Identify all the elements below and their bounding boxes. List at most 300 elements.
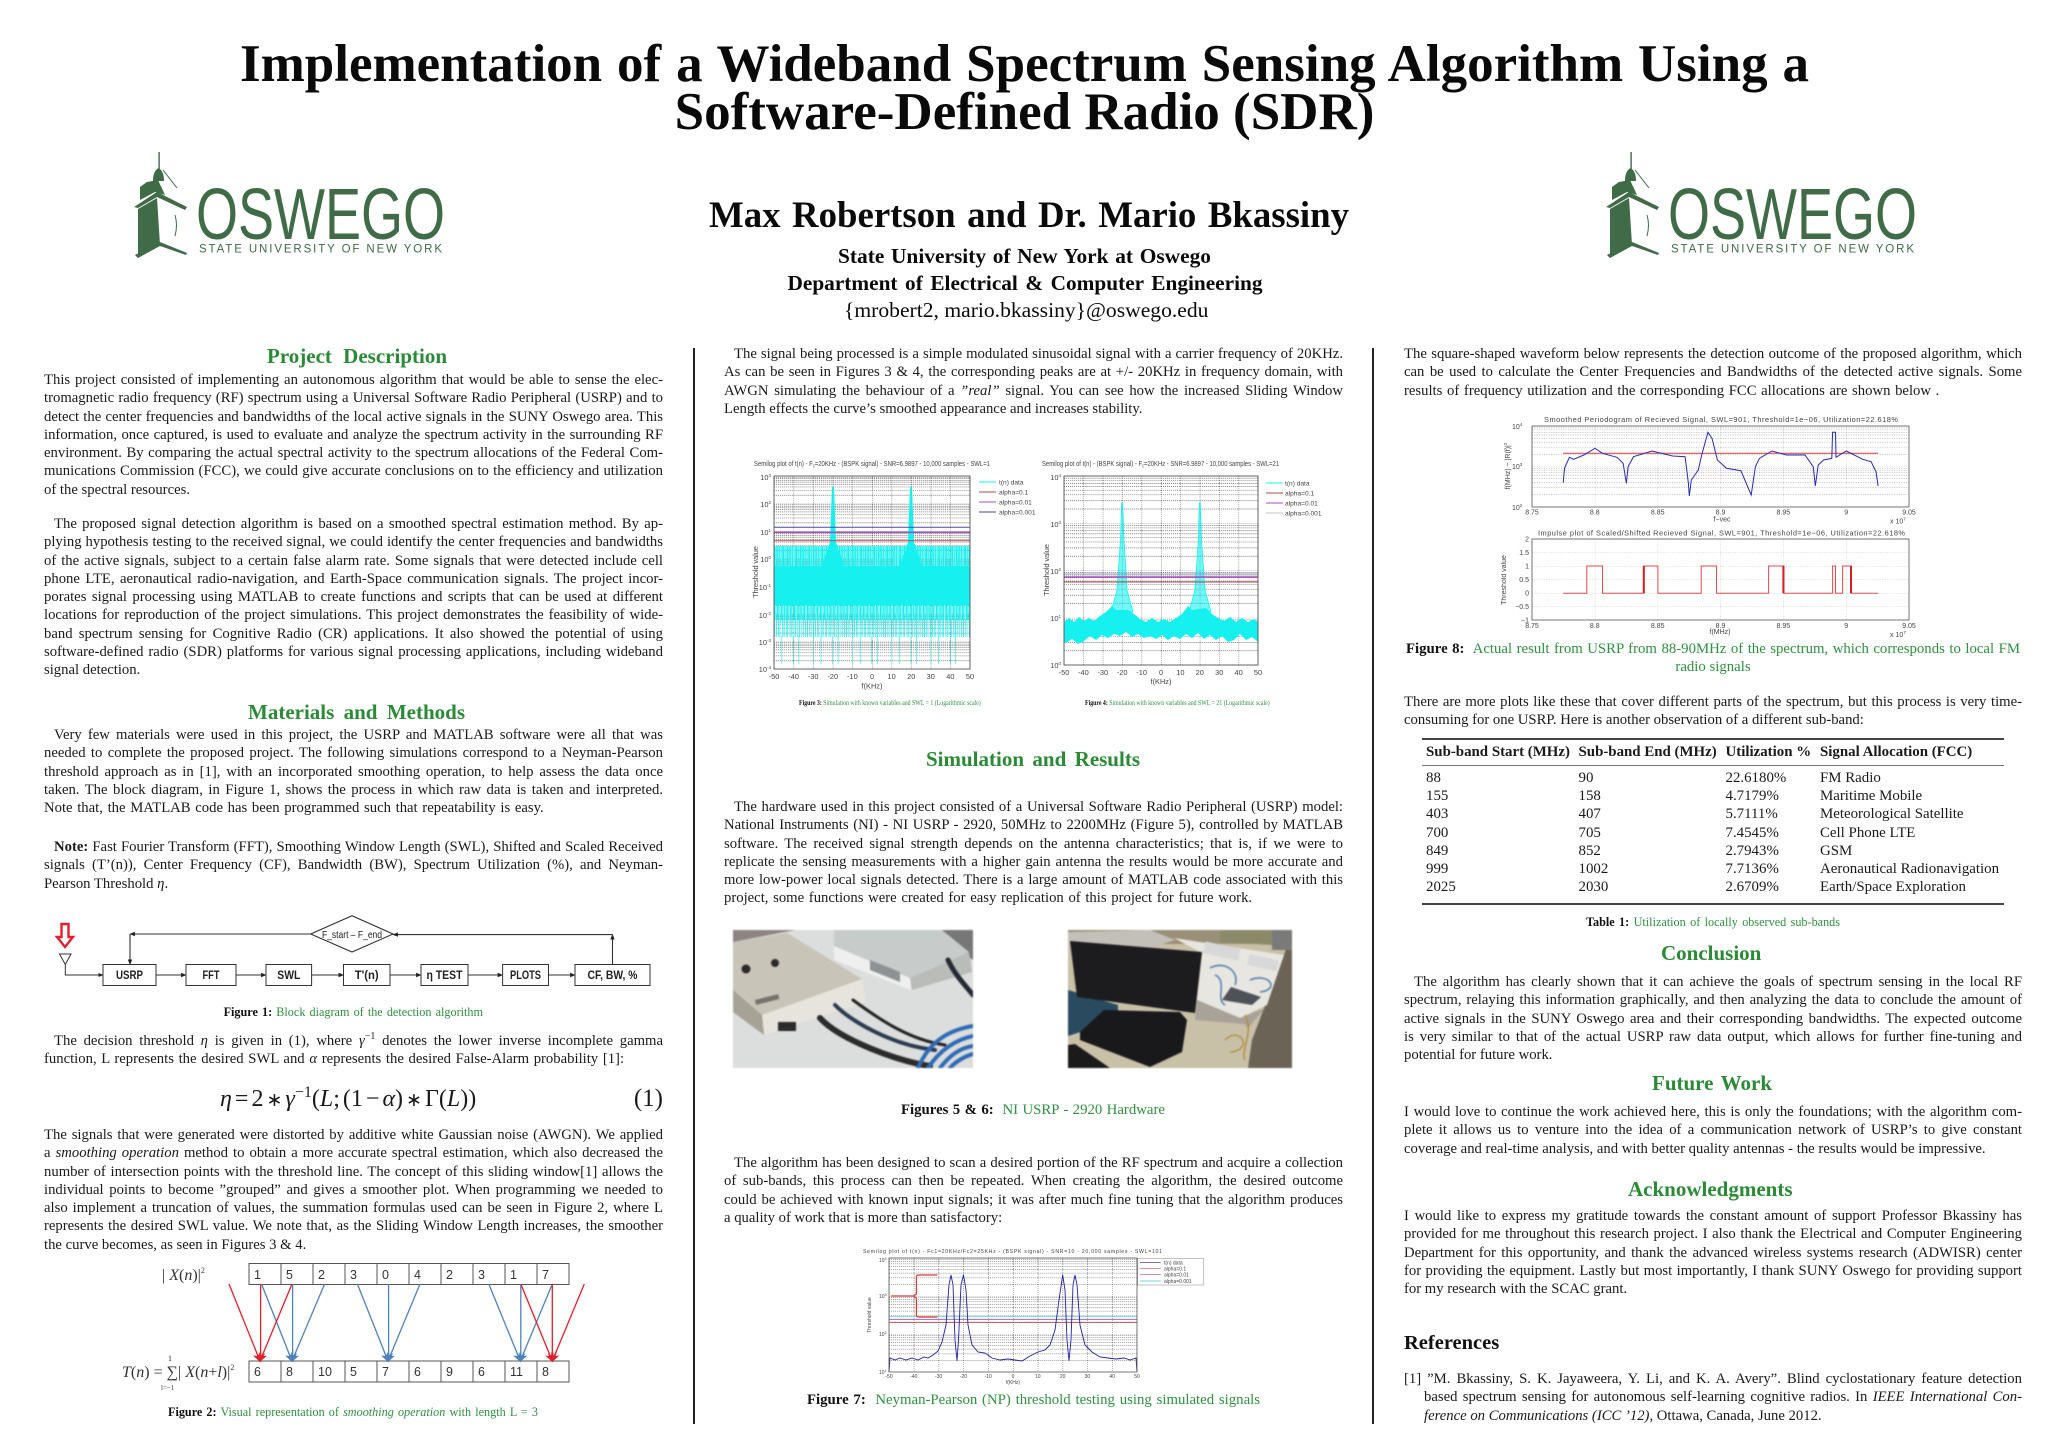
text: more plots: There are more plots like these that cover different parts of the spectrum, but this process is very time-	[1404, 694, 2022, 710]
axis labels: 10	[759, 665, 767, 674]
axis labels: 2	[1058, 567, 1061, 572]
legend: t(n) data	[1285, 480, 1310, 488]
text: materials and methods: Note that, the MATLAB code has been programmed such that repeatability is easy.	[44, 800, 544, 816]
text: signals and smoothing	[44, 1127, 663, 1253]
text: signals and smoothing: represents the desired SWL value. We note that, as the Sliding Window Length increases, the smoother	[44, 1218, 663, 1234]
threshold lines	[1064, 581, 1258, 583]
chart: figure 3 semilog plot SWL=1: 10	[887, 672, 896, 681]
text: project description 1: of the spectral resources.	[44, 482, 190, 498]
device front	[733, 933, 862, 1015]
legend: alpha=0.001	[1285, 510, 1322, 518]
caption: table 1: Table 1: Utilization of locally observed sub-bands	[1586, 915, 1840, 929]
subplot: smoothed periodogram: f−vec	[1714, 516, 1731, 524]
table header: Utilization %	[1726, 744, 1811, 760]
heading: simulation and results: Simulation and Results	[926, 747, 1140, 771]
table rows: Earth/Space Exploration	[1820, 879, 1966, 895]
axis labels: 10	[1050, 661, 1058, 670]
table rows: 999	[1426, 861, 1448, 877]
subplot: smoothed periodogram: 3	[1520, 462, 1523, 467]
chart: figure 3 semilog plot SWL=1: =20KHz - (BSPK signal) - SNR=6.9897 - 10,000 samples - SWL=1	[815, 459, 990, 468]
text: hardware: National Instruments (NI) - NI USRP - 2920, 50MHz to 2200MHz (Figure 5), controlled by MATLAB	[724, 817, 1343, 833]
table header: Sub-band Start (MHz)	[1426, 744, 1570, 760]
legend	[1138, 1259, 1204, 1285]
table rows: 2025	[1426, 879, 1456, 895]
text: project description 1: tromagnetic radio frequency (RF) spectrum using a Universal Software Radio Peripheral (USRP) and to	[44, 390, 663, 406]
table rows	[1426, 770, 1999, 895]
chart: figure 7 NP threshold plot: -10	[985, 1374, 992, 1380]
text: acknowledgments: for my research with the SCAC grant.	[1404, 1281, 1627, 1297]
subplot: impulse plot: Threshold value	[1501, 555, 1508, 605]
chart: figure 4 semilog plot SWL=21: -30	[1097, 668, 1108, 677]
axis labels: 0	[768, 555, 771, 560]
figure 1: block diagram: FFT	[202, 970, 220, 982]
chart: figure 3 semilog plot SWL=1: -10	[847, 672, 858, 681]
text: acknowledgments: for providing the equipment. Lastly but most importantly, I thank SUNY Oswego for providing support	[1404, 1263, 2022, 1279]
chart: figure 4 semilog plot SWL=21: 20	[1196, 668, 1204, 677]
text: hardware: replicate the sensing measurements with a higher gain antenna the results would be more accurate and	[724, 854, 1343, 870]
table rows: 407	[1578, 806, 1601, 822]
text: acknowledgments: I would like to express my gratitude towards the constant amount of support Professor Bkassiny has	[1404, 1208, 2022, 1224]
subplot: impulse plot: Impulse plot of Scaled/Shifted Recieved Signal, SWL=901, Threshold=1e−06, Utilization=22.618%	[1538, 528, 1905, 538]
blue arrows	[262, 1284, 552, 1361]
table rows: 1002	[1578, 861, 1608, 877]
chart: figure 3 semilog plot SWL=1: 40	[946, 672, 955, 681]
text: conclusion: active signals in the SUNY Oswego area and their corresponding bandwidths. The expected outcome	[1404, 1011, 2022, 1027]
table rows: Maritime Mobile	[1820, 788, 1922, 804]
chart: figure 7 NP threshold plot	[863, 1249, 1204, 1386]
axis labels: 10	[879, 1258, 885, 1264]
subplot: smoothed periodogram: 10	[1512, 424, 1520, 431]
chart: figure 7 NP threshold plot: -40	[910, 1374, 918, 1380]
left desk area	[1068, 990, 1118, 1036]
legend: alpha=0.01	[999, 500, 1032, 506]
text: signal intro	[724, 346, 1343, 417]
text: algorithm: of sub-bands, this process can then be repeated. When creating the algorithm, the desired outcome	[724, 1173, 1343, 1189]
axis labels: 10	[1050, 520, 1058, 529]
table rows: GSM	[1820, 843, 1852, 859]
series: smoothed signal	[1064, 606, 1258, 644]
chart: figure 3 semilog plot SWL=1: -20	[827, 672, 838, 681]
icon: antenna	[60, 954, 103, 975]
chart: figure 4 semilog plot SWL=21: c	[1142, 464, 1144, 470]
table	[1174, 938, 1284, 1018]
caption: figures 5 and 6: Figures 5 & 6: NI USRP - 2920 Hardware	[901, 1102, 1165, 1118]
formula labels: T(n) = ∑| X(n+l)|	[122, 1364, 230, 1381]
caption: figure 3: Figure 3: Simulation with known variables and SWL = 1 (Logarithmic scale)	[799, 700, 981, 707]
cell numbers: 10	[318, 1365, 332, 1379]
chart: figure 4 semilog plot SWL=21	[1042, 459, 1322, 686]
chart: figure 7 NP threshold plot: 40	[1109, 1374, 1115, 1380]
figure 1: block diagram: SWL	[277, 970, 300, 982]
photo: figure 6 monitor and workstation	[1067, 929, 1293, 1069]
chart: figure 8 periodogram and impulse plot	[1501, 415, 1916, 639]
legend	[979, 480, 1036, 516]
table rows: 155	[1426, 788, 1448, 804]
text: conclusion: potential for future work.	[1404, 1047, 1552, 1063]
text: more plots	[1404, 694, 2022, 728]
text: signals and smoothing: number of intersection points with the threshold line. The concept of this sliding window[1] allows the	[44, 1164, 663, 1180]
table rows: Aeronautical Radionavigation	[1820, 861, 1999, 877]
text: signal intro: The signal being processed is a simple modulated sinusoidal signal with a carrier frequency of 20KHz.	[734, 346, 1343, 362]
cell numbers: 5	[350, 1365, 357, 1379]
cell numbers: 6	[478, 1365, 485, 1379]
text: signal intro: As can be seen in Figures 3 & 4, the corresponding peaks are at +/- 20KHz in frequency domain, with	[724, 364, 1343, 380]
axis labels: 10	[1050, 473, 1058, 482]
subplot: impulse plot: 0	[1525, 590, 1529, 598]
chart: figure 3 semilog plot SWL=1: f(KHz)	[862, 682, 882, 690]
chart: figure 4 semilog plot SWL=21: -50	[1059, 668, 1069, 677]
cell numbers: 2	[446, 1268, 453, 1282]
subplot: smoothed periodogram: 10	[1512, 505, 1520, 512]
caption: figure 2: Figure 2: Visual representation of smoothing operation with length L = 3	[168, 1405, 538, 1419]
chart: figure 7 NP threshold plot: 30	[1085, 1374, 1090, 1380]
text: project description 2: band spectrum sensing for Cognitive Radio (CR) applications. It also showed the potential of using	[44, 626, 663, 642]
cell numbers: 3	[478, 1268, 485, 1282]
table rows: 5.7111%	[1726, 806, 1778, 822]
subplot: impulse plot: 0.5	[1519, 577, 1529, 584]
subplot: impulse plot: 7	[1903, 630, 1906, 635]
figure 1: block diagram: F_start – F_end	[322, 929, 382, 941]
table rows: Meteorological Satellite	[1820, 806, 1963, 822]
chart: figure 4 semilog plot SWL=21: 10	[1176, 668, 1185, 677]
cell numbers	[254, 1268, 549, 1379]
subplot: smoothed periodogram: Smoothed Periodogram of Recieved Signal, SWL=901, Threshold=1e−06, Utilization=22.618%	[1544, 415, 1898, 424]
chart: figure 4 semilog plot SWL=21: 40	[1234, 668, 1243, 677]
cell numbers: 6	[254, 1365, 261, 1379]
axis labels	[1050, 473, 1061, 670]
text: hardware: more low-power local signals detected. There is a large amount of MATLAB code associated with this	[724, 872, 1343, 888]
chart: figure 4 semilog plot SWL=21: -20	[1117, 668, 1128, 677]
axis labels: 0	[1058, 661, 1061, 666]
axis labels: 10	[760, 500, 768, 509]
caption: figure 8: Figure 8: Actual result from USRP from 88-90MHz of the spectrum, which corresponds to local FM	[1406, 641, 2020, 657]
subplot: impulse plot: 8.9	[1716, 623, 1725, 630]
chart: figure 7 NP threshold plot: 20	[1060, 1374, 1066, 1380]
chart: figure 3 semilog plot SWL=1: Threshold value	[751, 546, 760, 598]
text: acknowledgments	[1404, 1208, 2022, 1297]
text: note: Note: Fast Fourier Transform (FFT), Smoothing Window Length (SWL), Shifted and Scaled Received	[54, 839, 663, 855]
figure 1: block diagram: T'(n)	[355, 970, 379, 982]
column divider left	[692, 348, 694, 1424]
text: project description 1	[44, 372, 663, 498]
formula labels: 2	[230, 1363, 234, 1372]
chart: figure 7 NP threshold plot: f(KHz)	[1006, 1380, 1020, 1386]
formula labels: l=−1	[161, 1384, 175, 1392]
axis labels: 1	[768, 528, 771, 533]
caption: figure 7: Figure 7: Neyman-Pearson (NP) threshold testing using simulated signals	[807, 1392, 1260, 1408]
text: hardware: The hardware used in this project consisted of a Universal Software Radio Peripheral (USRP) model:	[734, 799, 1343, 815]
caption: figure 4: Figure 4: Simulation with known variables and SWL = 21 (Logarithmic scale)	[1085, 700, 1270, 707]
text: signals and smoothing: individual points to become ”grouped” and gives a smoother plot. When programming we needed to	[44, 1182, 663, 1198]
subplot: impulse plot: 8.75	[1525, 623, 1539, 630]
figure 1: block diagram: CF, BW, %	[588, 970, 638, 982]
authors and affiliation: Department of Electrical & Computer Engineering	[788, 271, 1262, 295]
axis labels: 10	[760, 555, 768, 564]
text: acknowledgments: provided for me throughout this research project. I also thank the Electrical and Computer Engineering	[1404, 1226, 2022, 1242]
text: materials and methods	[44, 727, 663, 816]
heading: materials and methods: Materials and Methods	[248, 700, 465, 724]
text: project description 2: phone LTE, aeronautical radio-navigation, and Earth-Space communication signals. The project incor-	[44, 571, 663, 587]
chart: figure 3 semilog plot SWL=1: 30	[927, 672, 935, 681]
axis labels: 2	[768, 500, 771, 505]
text: materials and methods: needed to complete the proposed project. The following simulations correspond to a Neyman-Pearson	[44, 745, 663, 761]
text: note: Pearson Threshold η.	[44, 876, 168, 892]
subplot: impulse plot	[1501, 528, 1916, 639]
subplot: smoothed periodogram: 4	[1520, 422, 1523, 427]
text: conclusion: spectrum, relaying this information graphically, and then analyzing the data to conclude the amount of	[1404, 992, 2022, 1008]
chart: figure 7 NP threshold plot: Threshold value	[867, 1297, 873, 1333]
subplot: smoothed periodogram: 8.9	[1716, 510, 1725, 516]
chart: figure 3 semilog plot SWL=1: 0	[870, 672, 874, 681]
axis labels: 10	[1050, 614, 1058, 623]
chart: figure 4 semilog plot SWL=21: Semilog plot of t(n) - (BSPK signal) - F	[1042, 459, 1171, 468]
table rows: 849	[1426, 843, 1448, 859]
text: conclusion	[1404, 974, 2022, 1063]
text: project description 2: signal detection.	[44, 662, 140, 678]
text: project description 2	[44, 516, 663, 678]
legend: t(n) data	[999, 480, 1024, 486]
threshold lines	[889, 1321, 1137, 1323]
text: note	[44, 839, 663, 892]
axis labels: 10	[879, 1370, 885, 1376]
authors and affiliation: {mrobert2, mario.bkassiny}@oswego.edu	[844, 298, 1208, 322]
figure 1: block diagram: η TEST	[426, 970, 462, 982]
axis labels: 10	[760, 473, 768, 482]
figure 2: smoothing diagram	[122, 1263, 585, 1392]
axis labels: -4	[767, 665, 771, 670]
table rows: 403	[1426, 806, 1448, 822]
cell numbers: 11	[510, 1365, 523, 1379]
table rows: 705	[1578, 825, 1601, 841]
text: references: ference on Communications (ICC ’12), Ottawa, Canada, June 2012.	[1424, 1408, 1822, 1424]
subplot: impulse plot: 8.85	[1651, 623, 1665, 630]
icon: red arrow	[57, 924, 73, 947]
text: references	[1404, 1371, 2022, 1424]
axis labels	[879, 1257, 887, 1376]
text: decision threshold	[44, 1031, 663, 1067]
text: future work: I would love to continue the work achieved here, this is only the foundations; with the algorithm com-	[1404, 1104, 2022, 1120]
cell numbers: 6	[414, 1365, 421, 1379]
heading: conclusion: Conclusion	[1661, 941, 1761, 965]
monitor	[1070, 941, 1202, 1013]
chart: figure 7 NP threshold plot: -50	[885, 1374, 893, 1380]
text: materials and methods: Very few materials were used in this project, the USRP and MATLAB software were all that was	[54, 727, 663, 743]
formula labels	[122, 1266, 234, 1392]
text: more plots: consuming for one USRP. Here is another observation of a different sub-band:	[1404, 712, 1864, 728]
subplot: smoothed periodogram: f(MHz) ~ |R(f)|	[1505, 445, 1512, 489]
subplot: smoothed periodogram: 2	[1520, 503, 1523, 508]
table rows: 90	[1578, 770, 1593, 786]
equation 1: (1)	[634, 1085, 663, 1112]
flow connectors	[130, 916, 612, 975]
authors and affiliation	[709, 194, 1349, 322]
text: project description 1: environment. By comparing the actual spectral activity to the spectrum allocations of the Federal Com-	[44, 445, 663, 461]
text: conclusion: The algorithm has clearly shown that it can achieve the goals of spectrum sensing in the local RF	[1414, 974, 2022, 990]
subplot: smoothed periodogram: 7	[1903, 516, 1906, 522]
text: references: [1] ”M. Bkassiny, S. K. Jayaweera, Y. Li, and K. A. Avery”. Blind cyclostationary feature detection	[1404, 1371, 2022, 1387]
table rows: 4.7179%	[1726, 788, 1779, 804]
subplot: impulse plot: x 10	[1890, 632, 1903, 639]
text: project description 1: This project consisted of implementing an autonomous algorithm that would be able to sense the elec-	[44, 372, 663, 388]
table rows: 2030	[1578, 879, 1608, 895]
subplot: smoothed periodogram: 9	[1844, 510, 1848, 516]
cell numbers: 5	[286, 1268, 293, 1282]
heading: project description: Project Description	[267, 344, 447, 368]
subplot: smoothed periodogram: 10	[1512, 464, 1520, 471]
text: algorithm: The algorithm has been designed to scan a desired portion of the RF spectrum and acquire a collection	[734, 1155, 1343, 1171]
cell numbers: 1	[510, 1268, 517, 1282]
title	[240, 35, 1809, 141]
legend: alpha=0.01	[1285, 500, 1318, 508]
grid cells	[249, 1264, 569, 1382]
chart: figure 7 NP threshold plot: 50	[1134, 1374, 1140, 1380]
logo: SUNY Oswego right: STATE UNIVERSITY OF NEW YORK	[1671, 244, 1914, 256]
table: utilization of sub-bands	[1422, 738, 2004, 905]
text: signals and smoothing: a smoothing operation method to obtain a more accurate spectral estimation, which also decreased the	[44, 1145, 663, 1161]
cell numbers: 8	[542, 1365, 549, 1379]
axis labels	[759, 473, 771, 674]
axis labels: 3	[885, 1293, 887, 1297]
series: signal	[889, 1275, 1137, 1372]
threshold lines	[774, 540, 970, 542]
chart: figure 4 semilog plot SWL=21: 30	[1215, 668, 1223, 677]
chart: figure 4 semilog plot SWL=21: 0	[1159, 668, 1163, 677]
axis labels: 10	[759, 583, 767, 592]
text: project description 2: plying hypothesis testing to the received signal, we could identify the center frequencies and bandwidths	[44, 534, 663, 550]
figure 1: block diagram	[54, 915, 650, 986]
legend: alpha=0.001	[1164, 1279, 1192, 1285]
text: future work: coverage and real-time analysis, and with better quality antennas - the results would be impressive.	[1404, 1141, 1986, 1157]
text: square-shaped waveform: can be used to calculate the Center Frequencies and Bandwidths of the detected active signals. Some	[1404, 364, 2022, 380]
axis labels: -2	[767, 611, 771, 616]
subplot: impulse plot: f(MHz)	[1710, 629, 1730, 636]
chart: figure 3 semilog plot SWL=1: 20	[907, 672, 915, 681]
formula labels: 1	[168, 1354, 172, 1363]
legend: alpha=0.1	[1164, 1266, 1186, 1272]
cell numbers: 0	[382, 1268, 389, 1282]
text: signals and smoothing: also implement a truncation of values, the summation formulas used can be seen in Figure 2, where L	[44, 1200, 663, 1216]
chart: figure 7 NP threshold plot: Semilog plot of t(n) - Fc1=20KHz/Fc2=25KHz - (BSPK signal) - SNR=10 - 20,000 samples - SWL=101	[863, 1249, 1162, 1255]
text: materials and methods: taken. The block diagram, in Figure 1, shows the process in which raw data is taken and interpreted.	[44, 782, 663, 798]
subplot: impulse plot: 9.05	[1902, 623, 1916, 630]
chart: figure 3 semilog plot SWL=1: 50	[966, 672, 974, 681]
axis labels: 10	[1050, 567, 1058, 576]
chart: figure 3 semilog plot SWL=1: c	[813, 464, 815, 470]
axis labels: 4	[885, 1257, 887, 1261]
logo: SUNY Oswego left	[134, 152, 445, 258]
series: noise	[774, 556, 970, 650]
chart: figure 7 NP threshold plot: -20	[960, 1374, 967, 1380]
authors and affiliation: Max Robertson and Dr. Mario Bkassiny	[709, 194, 1349, 235]
axis labels: 10	[759, 611, 767, 620]
cell numbers: 7	[382, 1365, 389, 1379]
logo: SUNY Oswego left: STATE UNIVERSITY OF NEW YORK	[199, 244, 442, 256]
subplot: smoothed periodogram: 8.75	[1525, 510, 1539, 516]
chart: figure 4 semilog plot SWL=21: -10	[1136, 668, 1147, 677]
equation 1	[220, 1084, 663, 1112]
axis labels: -1	[767, 583, 771, 588]
table header: Signal Allocation (FCC)	[1820, 744, 1972, 760]
text: project description 2: locations for reproduction of the project simulations. This project demonstrates the feasibility of wide-	[44, 607, 663, 623]
table rows: 158	[1578, 788, 1601, 804]
axis labels: 3	[768, 473, 771, 478]
table rows: 88	[1426, 770, 1441, 786]
legend: alpha=0.1	[999, 490, 1028, 496]
text: signal intro: Length effects the curve’s smoothed appearance and increases stability.	[724, 401, 1142, 417]
red arrows	[229, 1284, 584, 1361]
chart: figure 4 semilog plot SWL=21: f(KHz)	[1151, 677, 1171, 686]
subplot: smoothed periodogram	[1503, 415, 1916, 526]
network hub and devices	[1222, 987, 1261, 1005]
caption: figure 1: Figure 1: Block diagram of the detection algorithm	[224, 1005, 483, 1019]
heading: acknowledgments: Acknowledgments	[1628, 1177, 1793, 1201]
caption: figure 8: radio signals	[1675, 659, 1751, 675]
text: references: based spectrum sensing for autonomous self-learning cognitive radios. In IEEE International Con-	[1424, 1389, 2022, 1405]
table rows: 700	[1426, 825, 1448, 841]
chart: figure 4 semilog plot SWL=21: Threshold value	[1042, 544, 1051, 596]
subplot: impulse plot: 8.95	[1776, 623, 1790, 630]
chart: figure 4 semilog plot SWL=21: -40	[1078, 668, 1089, 677]
logo: SUNY Oswego right	[1606, 152, 1917, 258]
table rows: 2.7943%	[1726, 843, 1779, 859]
subplot: impulse plot: 1	[1525, 564, 1529, 570]
column divider right	[1372, 348, 1374, 1424]
back wall and papers	[1068, 930, 1292, 944]
text: project description 1: munications Commission (FCC), we could give accurate conclusions on to the efficiency and utilization	[44, 463, 663, 479]
legend: t(n) data	[1164, 1260, 1183, 1266]
chart: figure 4 semilog plot SWL=21: 50	[1254, 668, 1262, 677]
photo: figure 5 USRP hardware	[732, 929, 974, 1069]
formula labels: 2	[201, 1266, 205, 1275]
subplot: impulse plot: 8.8	[1590, 623, 1600, 630]
text: project description 2: software-defined radio (SDR) platforms for various signal processing applications, including wideband	[44, 644, 663, 660]
cell numbers: 3	[350, 1268, 357, 1282]
text: square-shaped waveform: The square-shaped waveform below represents the detection outcome of the proposed algorithm, which	[1404, 346, 2022, 362]
formula labels: | X(n)|	[162, 1267, 201, 1284]
subplot: smoothed periodogram: 2	[1503, 442, 1508, 445]
text: project description 1: information, once captured, is used to evaluate and analyze the spectrum activity in the surrounding RF	[44, 427, 663, 443]
text: future work	[1404, 1104, 2022, 1157]
chart: figure 4 semilog plot SWL=21: =20KHz - SNR=6.9897 - 10,000 samples - SWL=21	[1144, 459, 1279, 468]
text: hardware	[724, 799, 1343, 906]
text: conclusion: is very similar to that of the actual USRP raw data output, which allows for further fine-tuning and	[1404, 1029, 2022, 1045]
cell numbers: 4	[414, 1268, 421, 1282]
axis labels: -3	[767, 638, 771, 643]
figure 1: block diagram: PLOTS	[510, 970, 541, 982]
axis labels: 10	[759, 638, 767, 647]
axis labels: 1	[885, 1369, 887, 1373]
table rows: FM Radio	[1820, 770, 1881, 786]
equation 1: η = 2 ∗ γ−1(L; (1 − α) ∗ Γ(L))	[220, 1084, 476, 1112]
axis labels: 1	[1058, 614, 1061, 619]
text: algorithm: a quality of work that is more than satisfactory:	[724, 1210, 1002, 1226]
pc tower	[1080, 1010, 1187, 1067]
text: materials and methods: threshold approach as in [1], with an incorporated smoothing operation, to help assess the data once	[44, 764, 663, 780]
axis labels: 10	[879, 1332, 885, 1338]
text: algorithm: could be achieved with known input signals; it was after much fine tuning that the algorithm produces	[724, 1192, 1343, 1208]
legend: alpha=0.001	[999, 510, 1036, 516]
axis labels: 4	[1058, 473, 1061, 478]
axis labels: 10	[760, 528, 768, 537]
subplot: impulse plot: 9	[1844, 623, 1848, 630]
device rear	[834, 930, 969, 978]
text: algorithm	[724, 1155, 1343, 1226]
chart: figure 7 NP threshold plot: -30	[935, 1374, 942, 1380]
chart: figure 3 semilog plot SWL=1	[751, 459, 1036, 690]
chart: figure 7 NP threshold plot: 0	[1012, 1374, 1015, 1380]
subplot: impulse plot: −1	[1521, 618, 1529, 624]
table header	[1422, 740, 2004, 766]
